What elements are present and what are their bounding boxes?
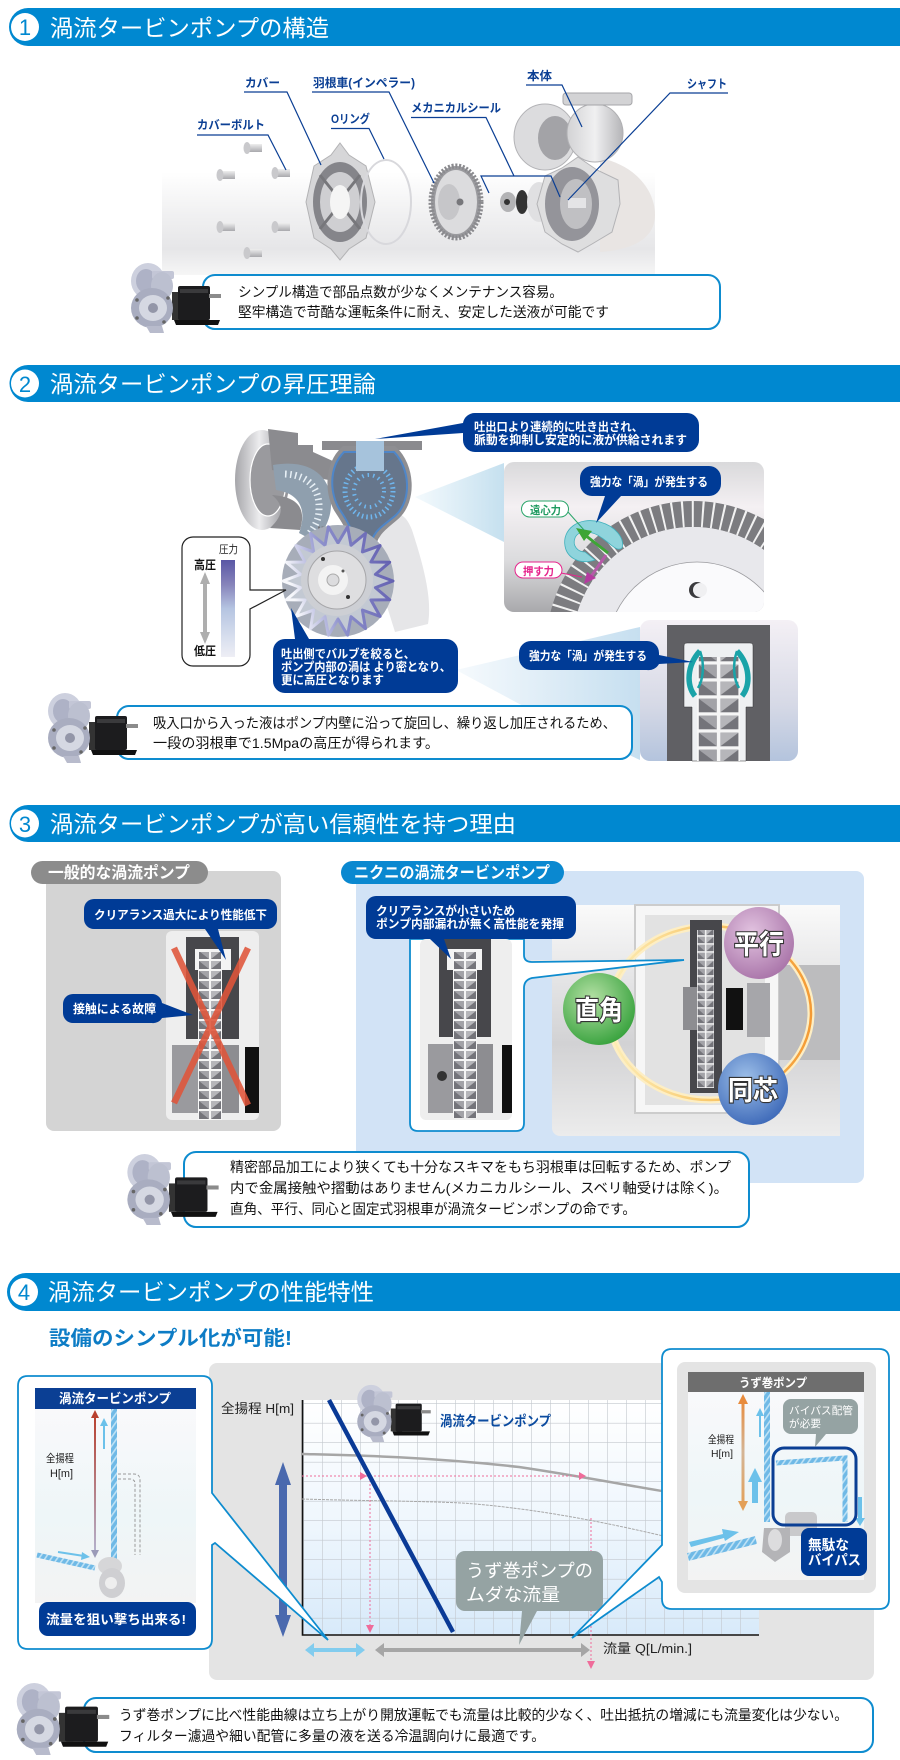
header bar 2	[10, 365, 900, 402]
ball: parallel: 平行	[734, 930, 784, 960]
panel: chart background	[209, 1363, 874, 1680]
part label: cover	[244, 76, 321, 165]
exploded pump illustration	[162, 93, 655, 275]
icon: pump	[131, 263, 221, 333]
head arrow	[275, 1462, 291, 1637]
flow range arrow light blue	[305, 1643, 365, 1657]
card: vortex turbine pump	[18, 1376, 328, 1649]
section 1: structure	[9, 8, 900, 333]
head arrow	[91, 1410, 99, 1558]
panel: general pump	[31, 861, 281, 1131]
ball: perpendicular	[563, 973, 635, 1045]
head label: H[m]	[50, 1468, 73, 1480]
callout 3	[127, 1152, 749, 1227]
blue callout: pinpoint flow: 流量を狙い撃ち出来る!	[46, 1612, 186, 1627]
header bar 2: 渦流タービンポンプの昇圧理論	[50, 371, 376, 397]
callout 4	[17, 1683, 873, 1755]
blue callout: discharge: 脈動を抑制し安定的に液が供給されます	[474, 432, 687, 447]
label: pushing force	[515, 562, 582, 578]
callout 2: 一段の羽根車で1.5Mpaの高圧が得られます。	[153, 735, 439, 751]
part label: cover bolt: カバーボルト	[197, 118, 265, 132]
part label: cover: カバー	[245, 76, 280, 90]
gray callout: wasted flow	[456, 1551, 603, 1645]
pressure legend: 高圧	[194, 557, 216, 572]
ball: perpendicular: 直角	[575, 996, 623, 1026]
x axis label: 流量 Q[L/min.]	[603, 1641, 692, 1656]
pink arrowheads	[360, 1472, 595, 1669]
blue callout: pinpoint flow	[39, 1602, 196, 1636]
pipes	[37, 1409, 140, 1568]
header bar 1: 渦流タービンポンプの構造	[50, 15, 329, 41]
label: centrifugal force: 遠心力	[530, 503, 561, 517]
header bar 3: 渦流タービンポンプが高い信頼性を持つ理由	[50, 811, 516, 837]
part label: shaft	[568, 77, 728, 200]
rear casing	[378, 514, 429, 632]
blue callout: vortex 2	[519, 641, 693, 670]
pump detail with pointer	[410, 939, 684, 1131]
card header: 渦流タービンポンプ	[59, 1391, 171, 1406]
part label: shaft: シャフト	[687, 77, 727, 91]
part label: O-ring	[331, 111, 384, 159]
pressure legend: 低圧	[194, 643, 216, 658]
pill heading: Nikuni: ニクニの渦流タービンポンプ	[354, 863, 550, 882]
green arrow: centrifugal	[576, 528, 608, 553]
gray callout: bypass required: が必要	[789, 1417, 822, 1430]
head label: 全揚程	[46, 1451, 74, 1465]
icon: pump	[127, 1154, 219, 1225]
label: pushing force: 押す力	[523, 564, 554, 578]
part label: O-ring: Oリング	[331, 111, 370, 126]
icon: cover bolts	[216, 142, 290, 259]
card header: うず巻ポンプ	[739, 1375, 807, 1390]
inlet pipe with speckle	[273, 464, 331, 541]
head label	[708, 1433, 734, 1460]
small pump	[98, 1557, 125, 1598]
head label	[46, 1451, 74, 1480]
blue callout: wasteful bypass	[801, 1528, 867, 1576]
panel: impeller cross-section	[640, 620, 798, 761]
pill heading: general: 一般的な渦流ポンプ	[48, 864, 190, 882]
gray callout: bypass required: バイパス配管	[789, 1404, 854, 1417]
magenta arrow: push	[584, 555, 606, 584]
blue callout: small clearance	[366, 896, 576, 959]
callout 3: 精密部品加工により狭くても十分なスキマをもち羽根車は回転するため、ポンプ	[230, 1159, 731, 1175]
header bar 4: 渦流タービンポンプの性能特性	[48, 1279, 374, 1305]
blue callout: valve: ポンプ内部の渦は より密となり、	[281, 659, 451, 674]
icon: O-ring	[361, 160, 411, 244]
blue callout: vortex 2: 強力な「渦」が発生する	[529, 648, 647, 663]
header bar 1	[9, 8, 900, 46]
panel: Nikuni pump	[341, 861, 864, 1183]
zoom cones	[415, 463, 640, 760]
pump cutaway illustration	[235, 429, 429, 637]
y axis label: 全揚程 H[m]	[221, 1401, 294, 1416]
blue callout: wasteful bypass: 無駄な	[808, 1537, 849, 1553]
part label: body: 本体	[527, 68, 552, 83]
icon: cover	[306, 143, 375, 260]
icon: pump body	[514, 93, 655, 252]
blue callout: small clearance: ポンプ内部漏れが無く高性能を発揮	[376, 916, 564, 931]
icon: pump	[17, 1683, 109, 1755]
gray callout: bypass required	[783, 1399, 858, 1447]
part label: impeller	[312, 75, 434, 183]
blue callout: discharge	[375, 413, 699, 452]
part label: mechanical seal: メカニカルシール	[411, 101, 501, 115]
callout 3: 内で金属接触や摺動はありません(メカニカルシール、スベリ軸受けは除く)。	[230, 1180, 728, 1196]
centrifugal curve	[302, 1454, 680, 1494]
blue callout: clearance too large	[84, 899, 277, 960]
callout 1	[131, 263, 720, 333]
card header	[688, 1372, 864, 1392]
blue callout: vortex: 強力な「渦」が発生する	[590, 474, 708, 489]
pump section image	[166, 931, 259, 1120]
gray callout: wasted flow: ムダな流量	[466, 1585, 560, 1605]
ball: concentric	[718, 1053, 788, 1125]
glowing ring	[609, 926, 811, 1100]
panel: parallel perpendicular concentric image	[531, 905, 840, 1136]
gray callout: wasted flow: うず巻ポンプの	[466, 1561, 593, 1581]
icon: mechanical seal	[500, 182, 559, 222]
callout 4: うず巻ポンプに比べ性能曲線は立ち上がり開放運転でも流量は比較的少なく、吐出抵抗の増減にも流量変化は少ない。	[119, 1707, 848, 1723]
blue callout: vortex	[580, 466, 721, 523]
part label: impeller: 羽根車(インペラー)	[313, 75, 415, 90]
card header	[35, 1388, 196, 1409]
outlet volute	[322, 441, 422, 550]
callout 1: シンプル構造で部品点数が少なくメンテナンス容易。	[238, 284, 563, 300]
inlet flange	[235, 429, 340, 530]
axes	[302, 1400, 759, 1635]
blue callout: contact failure	[63, 994, 193, 1023]
vortex turbine line	[329, 1400, 453, 1632]
callout 3: 直角、平行、同心と固定式羽根車が渦流タービンポンプの命です。	[230, 1201, 636, 1217]
blue callout: contact failure: 接触による故障	[73, 1001, 156, 1016]
callout 4: フィルター濾過や細い配管に多量の液を送る冷温調向けに最適です。	[119, 1728, 545, 1744]
ball: concentric: 同芯	[728, 1076, 778, 1106]
pill heading: general	[31, 861, 208, 884]
part label: body	[526, 68, 582, 127]
section 4: performance	[7, 1273, 900, 1755]
vortex label: 渦流タービンポンプ	[440, 1413, 551, 1429]
header bar 2: 2	[19, 372, 31, 397]
part label: cover bolt	[197, 118, 286, 170]
callout 2	[48, 693, 632, 763]
head label: H[m]	[711, 1448, 733, 1460]
card: centrifugal pump	[572, 1349, 889, 1638]
icon: impeller	[431, 166, 481, 238]
performance chart	[221, 1385, 759, 1669]
header bar 3: 3	[19, 812, 31, 837]
icon: pump	[48, 693, 138, 763]
icon: pump in chart	[357, 1385, 431, 1442]
part label: mechanical seal	[411, 101, 560, 197]
pill heading: Nikuni	[341, 861, 564, 884]
ball: parallel	[724, 907, 794, 979]
panel: impeller close-up	[504, 462, 764, 612]
header bar 3	[10, 805, 900, 842]
blue callout: small clearance: クリアランスが小さいため	[376, 903, 515, 918]
head label: 全揚程	[708, 1433, 734, 1446]
callout 2: 吸入口から入った液はポンプ内壁に沿って旋回し、繰り返し加圧されるため、	[153, 715, 616, 731]
subheading: 設備のシンプル化が可能!	[49, 1326, 292, 1350]
head arrow	[738, 1394, 748, 1511]
pink guides	[302, 1476, 591, 1668]
flow range arrow gray	[375, 1643, 590, 1657]
callout 1: 堅牢構造で苛酷な運転条件に耐え、安定した送液が可能です	[238, 304, 609, 320]
blue callout: clearance too large: クリアランス過大により性能低下	[94, 907, 267, 922]
header bar 1: 1	[19, 15, 31, 40]
pressure legend	[182, 537, 286, 666]
impeller with vortex	[282, 525, 394, 637]
blue callout: valve: 更に高圧となります	[281, 672, 384, 687]
label: centrifugal force	[522, 501, 584, 530]
blue callout: valve	[273, 608, 458, 693]
header bar 4: 4	[18, 1280, 30, 1305]
swirl icons	[689, 651, 748, 696]
header bar 4	[7, 1273, 900, 1311]
section 3: reliability	[10, 805, 900, 1227]
blue callout: valve: 吐出側でバルブを絞ると、	[281, 646, 415, 661]
red cross	[174, 948, 248, 1105]
centrifugal pump icon	[762, 1512, 817, 1562]
bypass highlight frame	[773, 1448, 856, 1525]
blue callout: wasteful bypass: バイパス	[808, 1552, 861, 1568]
pipes	[688, 1392, 865, 1557]
blue callout: discharge: 吐出口より連続的に吐き出され、	[474, 419, 643, 434]
section 2: pressure theory	[10, 365, 900, 782]
swirl	[565, 521, 623, 562]
thin centrifugal curve	[302, 1499, 680, 1540]
pressure legend: 圧力	[219, 543, 238, 556]
